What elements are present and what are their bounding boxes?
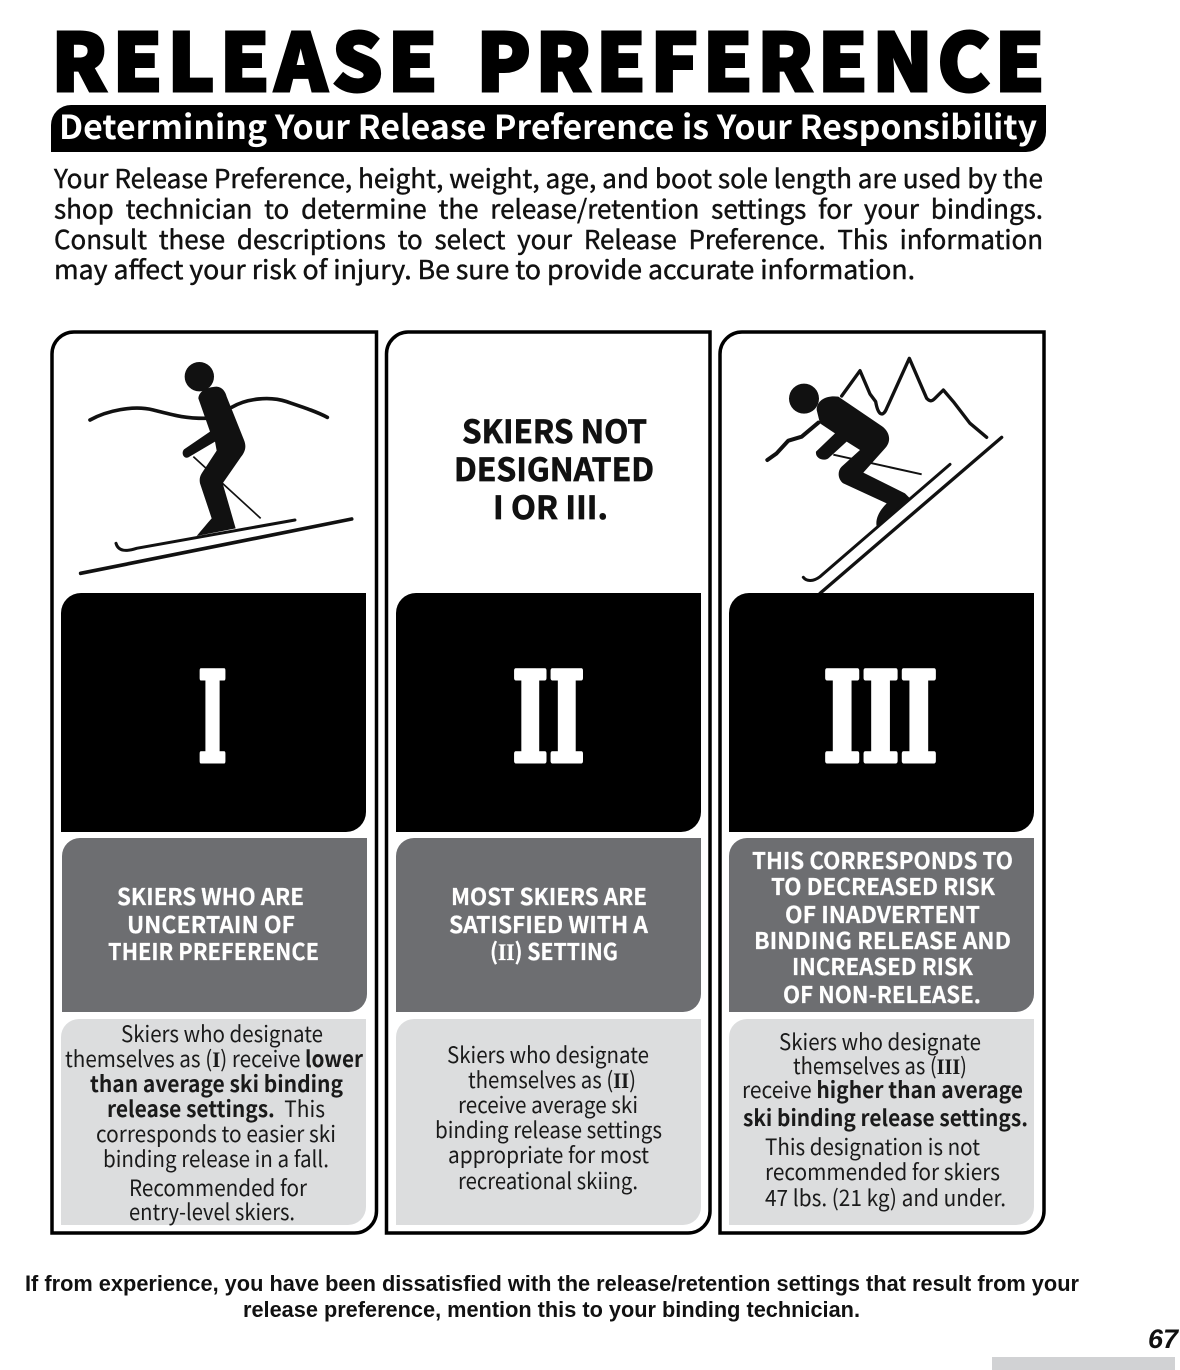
footer note: If from experience, you have been dissatisfied with the release/retention settings that result from your xyxy=(25,1271,1079,1296)
numeral block I: I xyxy=(198,646,227,791)
detail text III: recommended for skiers xyxy=(765,1155,1000,1187)
panel: preference I xyxy=(52,332,376,1233)
detail text I: Recommended for xyxy=(129,1171,307,1203)
detail text I: than average ski binding xyxy=(90,1067,344,1099)
detail text I: corresponds to easier ski xyxy=(96,1117,336,1149)
page number: 67 xyxy=(1148,1324,1180,1354)
description heading II: (II) SETTING xyxy=(490,933,618,967)
heading: skiers not designated: I OR III. xyxy=(493,483,608,529)
description heading II xyxy=(396,838,701,1012)
detail text II xyxy=(396,1019,701,1225)
intro paragraph: Your Release Preference, height, weight, age, and boot sole length are used by the xyxy=(53,159,1043,196)
panel: preference II xyxy=(386,332,710,1233)
description heading I: THEIR PREFERENCE xyxy=(108,933,319,967)
detail text I: release settings. This xyxy=(107,1092,325,1124)
intro paragraph: may affect your risk of injury. Be sure to provide accurate information. xyxy=(54,250,915,287)
description heading II: SATISFIED WITH A xyxy=(449,906,648,940)
detail text I: Skiers who designate xyxy=(121,1017,323,1049)
detail text II: appropriate for most xyxy=(448,1138,649,1170)
description heading III: BINDING RELEASE AND xyxy=(754,922,1011,956)
panel III outline xyxy=(720,332,1044,1233)
description heading II: MOST SKIERS ARE xyxy=(451,878,647,912)
detail text II: receive average ski xyxy=(458,1088,638,1120)
description heading III: INCREASED RISK xyxy=(792,948,973,982)
description heading I: SKIERS WHO ARE xyxy=(117,878,304,912)
detail text I: themselves as (I) receive lower xyxy=(65,1042,363,1074)
heading: skiers not designated xyxy=(454,407,654,529)
panel: preference III xyxy=(720,332,1044,1233)
numeral block II: II xyxy=(512,646,585,791)
heading: skiers not designated: DESIGNATED xyxy=(454,445,654,491)
detail text I: binding release in a fall. xyxy=(103,1142,329,1174)
description heading III: TO DECREASED RISK xyxy=(771,868,995,902)
numeral block II xyxy=(396,593,701,832)
detail text III: Skiers who designate xyxy=(779,1025,981,1057)
numeral block III xyxy=(729,593,1034,832)
description heading III: OF INADVERTENT xyxy=(785,896,980,930)
title xyxy=(52,0,1044,114)
description heading III: THIS CORRESPONDS TO xyxy=(752,842,1013,876)
detail text I: entry-level skiers. xyxy=(129,1195,295,1227)
title: PREFERENCE xyxy=(476,0,1044,114)
title: RELEASE xyxy=(52,0,438,114)
intro paragraph: shop technician to determine the release/retention settings for your bindings. xyxy=(54,190,1043,226)
description heading III xyxy=(729,838,1034,1012)
detail text III: 47 lbs. (21 kg) and under. xyxy=(765,1181,1006,1213)
icon: upright skier xyxy=(81,362,352,573)
detail text II: binding release settings xyxy=(435,1113,662,1145)
intro paragraph xyxy=(53,159,1043,287)
detail text III: ski binding release settings. xyxy=(743,1101,1028,1133)
icon: downhill skier with mountains xyxy=(767,358,1002,593)
detail text III: This designation is not xyxy=(765,1130,980,1162)
footer note: release preference, mention this to your binding technician. xyxy=(243,1297,860,1322)
subtitle banner: Determining Your Release Preference is Your Responsibility xyxy=(59,101,1037,149)
intro paragraph: Consult these descriptions to select your Release Preference. This information xyxy=(54,220,1043,257)
detail text I xyxy=(61,1017,366,1227)
numeral block I xyxy=(61,593,366,832)
heading: skiers not designated: SKIERS NOT xyxy=(462,407,647,453)
description heading III: OF NON-RELEASE. xyxy=(783,976,981,1010)
description heading I xyxy=(62,838,367,1012)
detail text II: themselves as (II) xyxy=(468,1063,636,1095)
panel I outline xyxy=(52,332,376,1233)
detail text II: recreational skiing. xyxy=(458,1164,638,1196)
detail text III: themselves as (III) xyxy=(793,1049,967,1081)
panel II outline xyxy=(386,332,710,1233)
description heading I: UNCERTAIN OF xyxy=(127,906,295,940)
detail text II: Skiers who designate xyxy=(447,1038,649,1070)
page tab xyxy=(992,1357,1175,1370)
detail text III: receive higher than average xyxy=(742,1073,1023,1105)
detail text III xyxy=(729,1019,1034,1225)
footer note xyxy=(25,1271,1079,1322)
numeral block III: III xyxy=(823,646,938,791)
